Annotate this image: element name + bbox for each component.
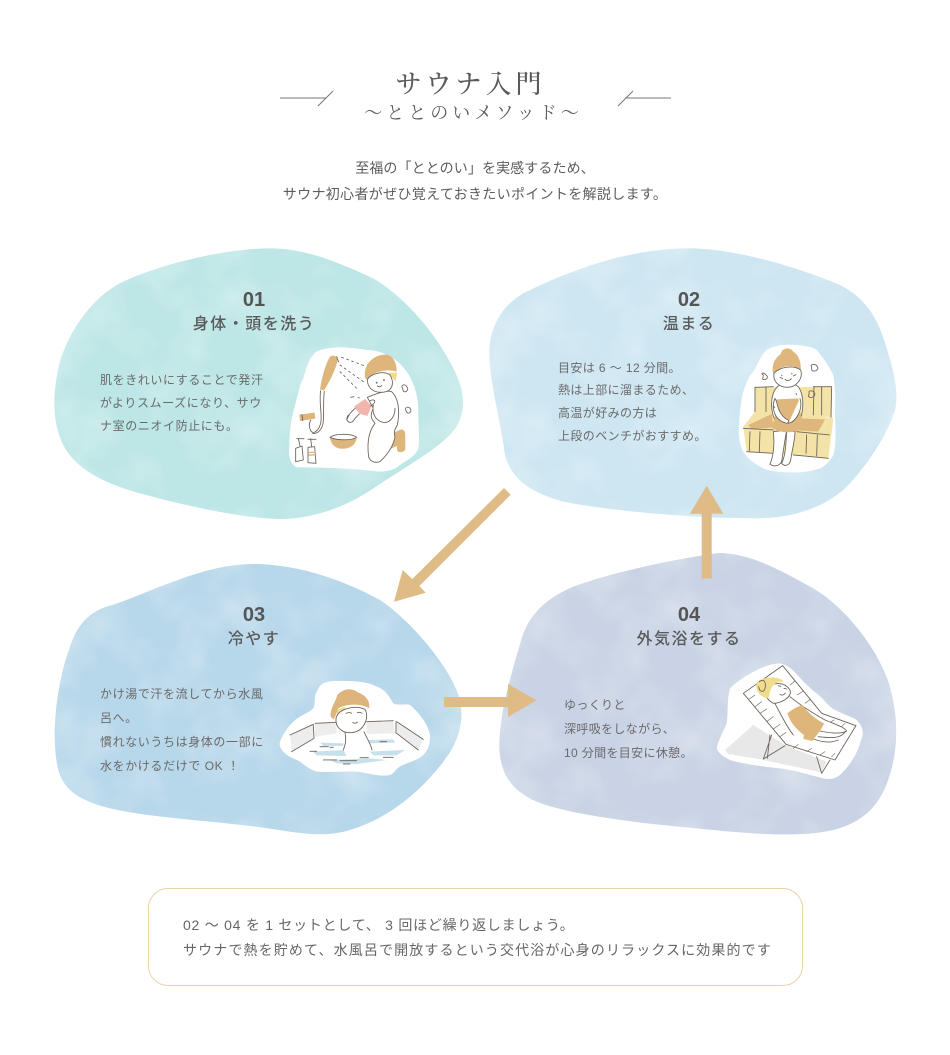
- body text 02: 上段のベンチがおすすめ。: [558, 429, 707, 443]
- blob 01: [54, 248, 463, 519]
- number 02: 02: [678, 289, 700, 311]
- body text 02: 高温が好みの方は: [558, 406, 657, 420]
- illustration: sitting in sauna: [738, 344, 836, 472]
- body text 03: [100, 687, 264, 773]
- heading 01: 身体・頭を洗う: [193, 316, 315, 333]
- heading 03: 冷やす: [228, 631, 280, 648]
- body text 03: 慣れないうちは身体の一部に: [100, 735, 264, 749]
- blob 02: [489, 248, 896, 518]
- illustration: resting on lounger: [716, 663, 863, 779]
- number 03: 03: [243, 604, 265, 626]
- body text 03: 呂へ。: [100, 711, 138, 725]
- callout text: 02 〜 04 を 1 セットとして、 3 回ほど繰り返しましょう。: [183, 917, 574, 933]
- panel: step 03: [54, 564, 462, 834]
- panel: step 04: [499, 553, 896, 834]
- body text 03: 水をかけるだけで OK ！: [100, 759, 240, 773]
- heading 04: 外気浴をする: [636, 631, 742, 648]
- intro text: サウナ初心者がぜひ覚えておきたいポイントを解説します。: [283, 186, 667, 202]
- number 01: 01: [243, 289, 265, 311]
- blob 04: [499, 553, 896, 834]
- body text 01: 肌をきれいにすることで発汗: [100, 373, 264, 387]
- body text 04: [564, 698, 693, 760]
- body text 03: かけ湯で汗を流してから水風: [100, 687, 263, 701]
- panel: step 01: [54, 248, 463, 519]
- body text 02: [558, 360, 707, 443]
- illustration: washing at shower: [289, 347, 419, 472]
- blob 03: [54, 564, 462, 834]
- callout box: [148, 888, 803, 986]
- body text 01: がよりスムーズになり、サウ: [100, 396, 262, 410]
- subtitle: 〜ととのいメソッド〜: [364, 103, 583, 123]
- callout text: [183, 917, 772, 958]
- body text 01: [100, 373, 264, 433]
- heading 02: 温まる: [663, 316, 715, 333]
- panel: step 02: [489, 248, 896, 518]
- number 04: 04: [678, 604, 700, 626]
- body text 01: ナ室のニオイ防止にも。: [100, 419, 239, 433]
- intro text: [283, 160, 667, 202]
- title: サウナ入門: [395, 70, 546, 99]
- title block: [280, 70, 671, 123]
- intro text: 至福の「ととのい」を実感するため、: [355, 160, 595, 176]
- body text 04: 深呼吸をしながら、: [564, 722, 675, 736]
- callout text: サウナで熱を貯めて、水風呂で開放するという交代浴が心身のリラックスに効果的です: [183, 942, 772, 958]
- body text 02: 熱は上部に溜まるため、: [558, 383, 694, 397]
- body text 04: ゆっくりと: [564, 698, 626, 712]
- title flourishes: [280, 90, 671, 106]
- illustration: cold bath: [280, 680, 430, 776]
- body text 04: 10 分間を目安に休憩。: [564, 746, 693, 760]
- body text 02: 目安は 6 〜 12 分間。: [558, 360, 681, 374]
